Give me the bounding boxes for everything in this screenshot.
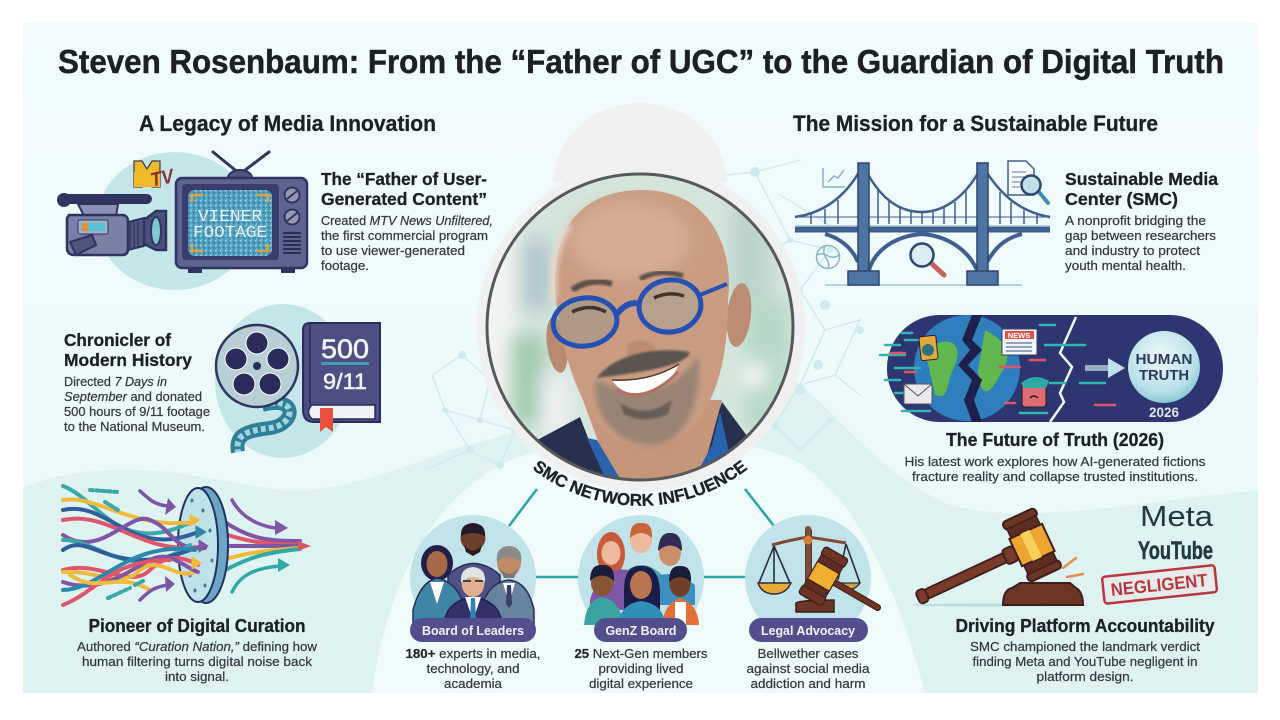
portrait ring [487, 174, 793, 480]
text: board of leaders: technology, and [426, 661, 520, 676]
text: chronicler: Directed 7 Days in [64, 374, 167, 389]
text: father of UGC: the first commercial program [321, 228, 488, 243]
text: SMC: Sustainable Media [1065, 169, 1218, 189]
logo text: YouTube: YouTube [1138, 537, 1213, 565]
stamp: negligent: NEGLIGENT [1110, 570, 1208, 600]
text: genz board: digital experience [589, 676, 693, 691]
text: future of truth: His latest work explores how AI-generated fictions [904, 454, 1206, 469]
text: chronicler: Modern History [64, 350, 192, 370]
text: board of leaders: academia [444, 676, 503, 691]
text: SMC [1065, 169, 1218, 273]
text: chronicler: 500 hours of 9/11 footage [64, 404, 210, 419]
text: legal advocacy: against social media [746, 661, 870, 676]
text: board of leaders: 180+ experts in media, [406, 646, 540, 661]
text: genz board: 25 Next-Gen members [574, 646, 708, 661]
icon: fractured globe to human truth pill: HUMAN [1136, 351, 1192, 368]
node: legal advocacy: Legal Advocacy [761, 623, 856, 638]
curved label: SMC network influence: SMC NETWORK INFLUENCE [534, 460, 748, 506]
icon: MTV logo [134, 161, 177, 192]
heading: mission: The Mission for a Sustainable Future [793, 111, 1158, 136]
icon: book 500 9/11: 9/11 [323, 369, 367, 394]
icon: bridge [795, 163, 1050, 285]
text: accountability: Driving Platform Accountability [956, 616, 1214, 636]
title: Steven Rosenbaum: From the “Father of UGC” to the Guardian of Digital Truth [58, 43, 1224, 80]
text: chronicler: September and donated [64, 389, 202, 404]
portrait backdrop [477, 103, 805, 491]
connectors [509, 489, 774, 577]
text: future of truth [904, 430, 1206, 484]
text: legal advocacy: addiction and harm [750, 676, 866, 691]
text: pioneer: into signal. [165, 669, 229, 684]
text: genz board [574, 646, 708, 691]
node: board of leaders: Board of Leaders [422, 623, 524, 638]
text: SMC: and industry to protect [1065, 243, 1200, 258]
text: genz board: providing lived [598, 661, 684, 676]
text: chronicler: Chronicler of [64, 330, 171, 350]
text: board of leaders [406, 646, 540, 691]
text: father of UGC: footage. [321, 258, 369, 273]
text: chronicler: to the National Museum. [64, 419, 205, 434]
network background decoration left [425, 351, 555, 470]
logo text: Meta: Meta [1140, 501, 1214, 533]
text: pioneer: Pioneer of Digital Curation [88, 616, 306, 636]
icon: fractured globe to human truth pill: TRUTH [1139, 367, 1189, 384]
text: accountability: platform design. [1036, 669, 1134, 684]
text: accountability: SMC championed the landmark verdict [970, 639, 1200, 654]
text: pioneer: Authored “Curation Nation,” defining how [77, 639, 318, 654]
text: father of UGC [321, 169, 493, 273]
icon: fractured globe to human truth pill [880, 315, 1223, 422]
icon: teal blob behind reel [215, 304, 351, 458]
text: father of UGC: The “Father of User- [321, 169, 487, 189]
node: board of leaders [410, 515, 536, 642]
icon: document with magnifier [1008, 161, 1048, 203]
icon: magnifier on bridge [910, 244, 944, 275]
text: legal advocacy [746, 646, 870, 691]
network background decoration right [727, 160, 864, 450]
icon: film reel [216, 325, 298, 407]
icon: fractured globe to human truth pill: 2026 [1149, 405, 1180, 420]
text: SMC: gap between researchers [1065, 228, 1217, 243]
icon: MTV logo: TV [149, 165, 177, 192]
icon: noise filter [63, 486, 311, 605]
text: pioneer: human filtering turns digital noise back [82, 654, 313, 669]
icon: fractured globe to human truth pill: NEWS [1008, 331, 1030, 340]
text: father of UGC: Generated Content” [321, 189, 487, 209]
icon: vintage TV [176, 152, 307, 273]
text: future of truth: The Future of Truth (2026) [946, 430, 1164, 450]
text: father of UGC: to use viewer-generated [321, 243, 465, 258]
icon: book 500 9/11 [303, 323, 380, 432]
node: genz board: GenZ Board [606, 623, 677, 638]
icon: teal blob behind TV [97, 152, 253, 290]
text: pioneer [77, 616, 318, 684]
text: accountability [956, 616, 1214, 684]
text: SMC: Center (SMC) [1065, 189, 1178, 209]
portrait photo [501, 176, 792, 478]
icon: vintage TV: VIENER [198, 208, 262, 227]
icon: video camera [57, 193, 166, 255]
icon: book 500 9/11: 500 [321, 334, 369, 364]
text: SMC: youth mental health. [1065, 258, 1186, 273]
node: legal advocacy [745, 515, 894, 642]
icon: vintage TV: FOOTAGE [193, 224, 267, 243]
text: chronicler [64, 330, 210, 434]
node: genz board [578, 515, 704, 642]
text: father of UGC: Created MTV News Unfiltered, [321, 213, 493, 228]
text: future of truth: fracture reality and collapse trusted institutions. [912, 469, 1198, 484]
icon: large gavel [904, 507, 1090, 628]
icon: chart and globe [816, 168, 845, 268]
heading: legacy: A Legacy of Media Innovation [139, 111, 436, 136]
text: legal advocacy: Bellwether cases [758, 646, 859, 661]
text: SMC: A nonprofit bridging the [1065, 213, 1206, 228]
icon: film strip [237, 403, 290, 452]
text: accountability: finding Meta and YouTube negligent in [972, 654, 1198, 669]
